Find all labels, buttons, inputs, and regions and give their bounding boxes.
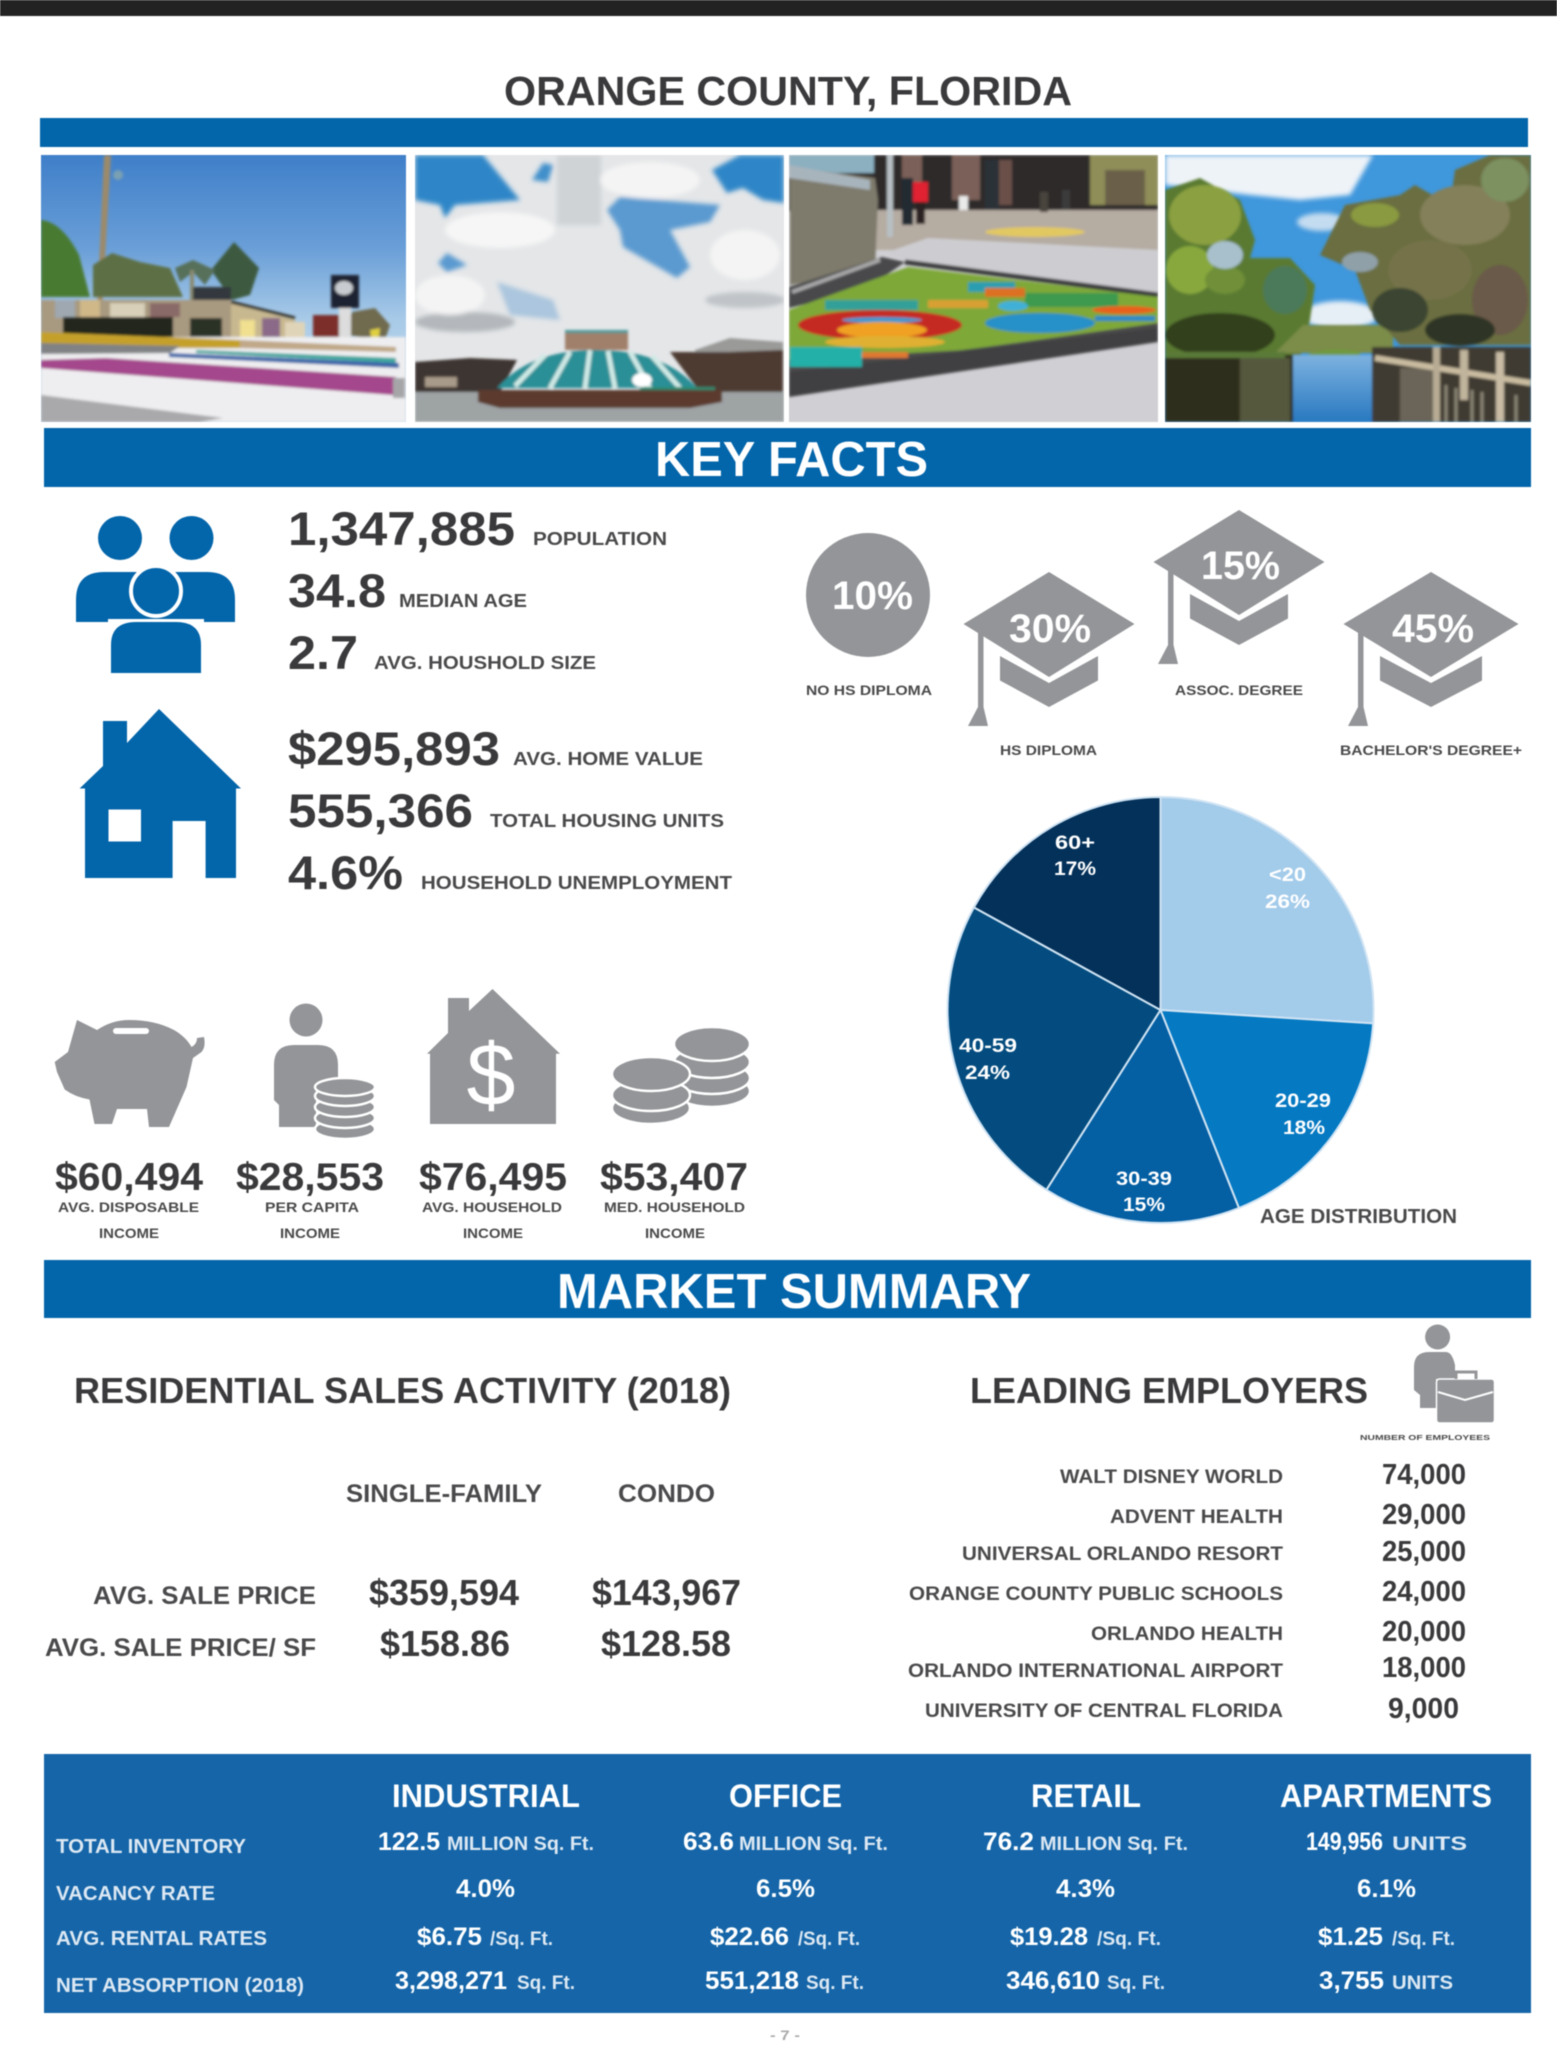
education: associate degree cap xyxy=(1154,510,1324,698)
education: bachelor's degree cap: BACHELOR'S DEGREE+ xyxy=(1340,742,1522,758)
education: no HS diploma xyxy=(806,533,932,698)
row labels: TOTAL INVENTORY xyxy=(56,1836,247,1858)
residential sales table: $158.86 xyxy=(380,1623,510,1664)
residential sales table: AVG. SALE PRICE/ SF xyxy=(45,1634,316,1662)
employers list xyxy=(908,1459,1466,1725)
rental rate values xyxy=(417,1923,1455,1951)
pie chart: age distribution: 30-39 xyxy=(1116,1169,1172,1190)
net absorption values: 346,610 xyxy=(1006,1967,1100,1995)
title: ORANGE COUNTY, FLORIDA xyxy=(504,68,1072,114)
housing stats xyxy=(288,722,732,899)
total inventory values: MILLION Sq. Ft. xyxy=(447,1834,594,1855)
column headings: INDUSTRIAL xyxy=(392,1778,580,1814)
education: HS diploma cap xyxy=(964,572,1134,758)
total inventory values: MILLION Sq. Ft. xyxy=(739,1834,888,1855)
income figures: INCOME xyxy=(463,1225,523,1241)
employers list: ORLANDO HEALTH xyxy=(1091,1624,1283,1645)
population stats: POPULATION xyxy=(533,529,667,549)
employers list: 24,000 xyxy=(1382,1576,1466,1608)
rental rate values: /Sq. Ft. xyxy=(490,1929,553,1950)
leading employers heading: LEADING EMPLOYERS xyxy=(970,1370,1368,1411)
housing stats: $295,893 xyxy=(288,722,500,775)
net absorption values xyxy=(395,1967,1453,1995)
population stats: AVG. HOUSHOLD SIZE xyxy=(374,653,596,673)
income figures: INCOME xyxy=(280,1225,340,1241)
education: HS diploma cap: 30% xyxy=(1009,607,1091,651)
vacancy rate values: 4.3% xyxy=(1056,1875,1115,1903)
net absorption values: UNITS xyxy=(1392,1973,1453,1994)
icon: house with dollar: $ xyxy=(467,1025,515,1124)
education: bachelor's degree cap: 45% xyxy=(1392,607,1474,651)
education: no HS diploma: NO HS DIPLOMA xyxy=(806,682,932,698)
housing stats: 4.6% xyxy=(288,846,403,899)
rental rate values: $19.28 xyxy=(1010,1923,1088,1951)
row labels: AVG. RENTAL RATES xyxy=(56,1928,267,1950)
pie chart: age distribution: 20-29 xyxy=(1275,1091,1331,1112)
total inventory values: 76.2 xyxy=(983,1828,1034,1856)
vacancy rate values: 6.1% xyxy=(1357,1875,1416,1903)
vacancy rate values xyxy=(456,1875,1416,1903)
title rule bar xyxy=(40,118,1528,147)
pie chart: age distribution: 40-59 xyxy=(959,1036,1017,1057)
rental rate values: $22.66 xyxy=(710,1923,789,1951)
residential sales table: $143,967 xyxy=(592,1572,741,1613)
row labels: NET ABSORPTION (2018) xyxy=(56,1975,304,1997)
employers list: ORLANDO INTERNATIONAL AIRPORT xyxy=(908,1661,1283,1682)
photo: mosaic plaza xyxy=(789,155,1158,422)
employers list: 18,000 xyxy=(1382,1652,1466,1684)
icon: employee with briefcase xyxy=(1414,1324,1494,1423)
residential sales table xyxy=(45,1480,741,1664)
commercial market table panel xyxy=(44,1754,1531,2013)
employers list: UNIVERSAL ORLANDO RESORT xyxy=(962,1544,1283,1565)
population stats: MEDIAN AGE xyxy=(399,591,527,611)
population stats xyxy=(288,502,667,679)
icon: coin stacks xyxy=(612,1027,750,1124)
total inventory values: 63.6 xyxy=(683,1828,734,1856)
housing stats: HOUSEHOLD UNEMPLOYMENT xyxy=(421,873,732,893)
employers list: 74,000 xyxy=(1382,1459,1466,1491)
net absorption values: Sq. Ft. xyxy=(806,1973,864,1994)
rental rate values: /Sq. Ft. xyxy=(798,1929,860,1950)
total inventory values: 149,956 xyxy=(1306,1828,1383,1856)
net absorption values: 3,755 xyxy=(1319,1967,1384,1995)
income figures: $76,495 xyxy=(419,1156,567,1199)
employers list: 20,000 xyxy=(1382,1616,1466,1648)
population stats: 2.7 xyxy=(288,626,358,679)
education: no HS diploma: 10% xyxy=(832,574,913,618)
employers list: ADVENT HEALTH xyxy=(1110,1507,1283,1528)
icon: house xyxy=(80,709,241,878)
icon: people xyxy=(76,516,235,673)
total inventory values: 122.5 xyxy=(378,1828,440,1856)
pie chart: age distribution: 26% xyxy=(1265,892,1310,913)
pie chart: age distribution: 17% xyxy=(1054,859,1096,880)
market summary banner: MARKET SUMMARY xyxy=(557,1265,1031,1319)
icon: person with coins xyxy=(274,1004,375,1139)
education: bachelor's degree cap xyxy=(1340,572,1522,758)
housing stats: AVG. HOME VALUE xyxy=(513,749,703,769)
photo: river and trees xyxy=(1165,155,1531,422)
residential sales heading: RESIDENTIAL SALES ACTIVITY (2018) xyxy=(74,1370,731,1411)
rental rate values: /Sq. Ft. xyxy=(1097,1929,1161,1950)
income figures: $28,553 xyxy=(236,1156,384,1199)
net absorption values: 3,298,271 xyxy=(395,1967,507,1995)
income figures: PER CAPITA xyxy=(265,1199,359,1215)
page number: - 7 - xyxy=(770,2027,800,2043)
education: associate degree cap: 15% xyxy=(1201,544,1280,588)
employers list: UNIVERSITY OF CENTRAL FLORIDA xyxy=(925,1701,1283,1722)
net absorption values: Sq. Ft. xyxy=(1107,1973,1165,1994)
net absorption values: Sq. Ft. xyxy=(517,1973,575,1994)
photo: street crosswalk xyxy=(41,155,406,422)
vacancy rate values: 6.5% xyxy=(756,1875,815,1903)
income figures: AVG. DISPOSABLE xyxy=(58,1199,199,1215)
rental rate values: /Sq. Ft. xyxy=(1392,1929,1455,1950)
residential sales table: SINGLE-FAMILY xyxy=(346,1480,542,1508)
icon: piggy bank xyxy=(55,1020,205,1127)
residential sales table: $128.58 xyxy=(601,1623,731,1664)
housing stats: 555,366 xyxy=(288,784,473,837)
column headings: RETAIL xyxy=(1031,1778,1141,1814)
pie chart: age distribution: 18% xyxy=(1283,1118,1325,1139)
key facts banner xyxy=(44,428,1531,487)
column headings xyxy=(392,1778,1492,1814)
income figures: $53,407 xyxy=(600,1156,748,1199)
residential sales table: $359,594 xyxy=(369,1572,519,1613)
pie chart: age distribution: 60+ xyxy=(1055,833,1095,854)
top window bar xyxy=(0,0,1557,16)
housing stats: TOTAL HOUSING UNITS xyxy=(490,811,724,831)
residential sales table: CONDO xyxy=(618,1480,715,1508)
vacancy rate values: 4.0% xyxy=(456,1875,515,1903)
education: associate degree cap: ASSOC. DEGREE xyxy=(1175,682,1303,698)
employers list: ORANGE COUNTY PUBLIC SCHOOLS xyxy=(909,1584,1283,1605)
employee count caption: NUMBER OF EMPLOYEES xyxy=(1360,1435,1490,1442)
rental rate values: $6.75 xyxy=(417,1923,482,1951)
employers list: 29,000 xyxy=(1382,1499,1466,1531)
total inventory values: MILLION Sq. Ft. xyxy=(1040,1834,1188,1855)
pie chart: age distribution: 15% xyxy=(1123,1195,1165,1216)
income figures: INCOME xyxy=(645,1225,705,1241)
employers list: 25,000 xyxy=(1382,1536,1466,1568)
total inventory values: UNITS xyxy=(1392,1834,1467,1855)
row labels xyxy=(56,1836,304,1997)
total inventory values xyxy=(378,1828,1467,1856)
photo: lake fountain xyxy=(415,155,785,422)
employers list: 9,000 xyxy=(1388,1693,1459,1725)
rental rate values: $1.25 xyxy=(1318,1923,1383,1951)
pie chart: age distribution: <20 xyxy=(1269,865,1306,886)
income figures xyxy=(55,1156,748,1241)
population stats: 34.8 xyxy=(288,564,386,617)
pie chart: age distribution: 24% xyxy=(965,1063,1010,1084)
education: HS diploma cap: HS DIPLOMA xyxy=(1000,742,1097,758)
residential sales table: AVG. SALE PRICE xyxy=(93,1582,316,1610)
market summary banner xyxy=(44,1260,1531,1319)
income figures: INCOME xyxy=(99,1225,159,1241)
column headings: OFFICE xyxy=(729,1778,842,1814)
key facts banner: KEY FACTS xyxy=(655,433,928,487)
icon: house with dollar xyxy=(427,989,560,1124)
net absorption values: 551,218 xyxy=(705,1967,799,1995)
column headings: APARTMENTS xyxy=(1280,1778,1492,1814)
employers list: WALT DISNEY WORLD xyxy=(1060,1467,1283,1488)
row labels: VACANCY RATE xyxy=(56,1883,215,1905)
income figures: AVG. HOUSEHOLD xyxy=(422,1199,562,1215)
pie chart: age distribution xyxy=(948,797,1374,1223)
population stats: 1,347,885 xyxy=(288,502,515,555)
pie caption: AGE DISTRIBUTION xyxy=(1260,1206,1457,1228)
income figures: $60,494 xyxy=(55,1156,203,1199)
income figures: MED. HOUSEHOLD xyxy=(604,1199,745,1215)
